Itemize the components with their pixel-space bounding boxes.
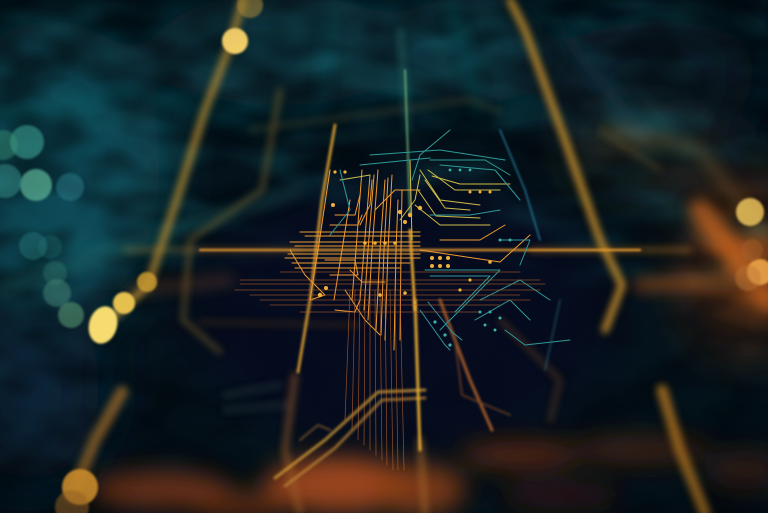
solder pads: [318, 170, 492, 297]
teal streak texture: [0, 0, 768, 290]
near-focus traces: [275, 125, 560, 486]
far blurred traces: [0, 0, 768, 300]
teal pads: [433, 169, 512, 347]
in-focus traces: teal: [330, 130, 570, 350]
in-focus traces: yellow green: [340, 160, 510, 240]
lower orange blotches: [90, 436, 768, 513]
bokeh lights: left teal: [0, 125, 84, 328]
fine horizontal and vertical lines: [235, 272, 545, 470]
in-focus traces: orange: [285, 170, 530, 350]
dark central area: [150, 155, 650, 475]
